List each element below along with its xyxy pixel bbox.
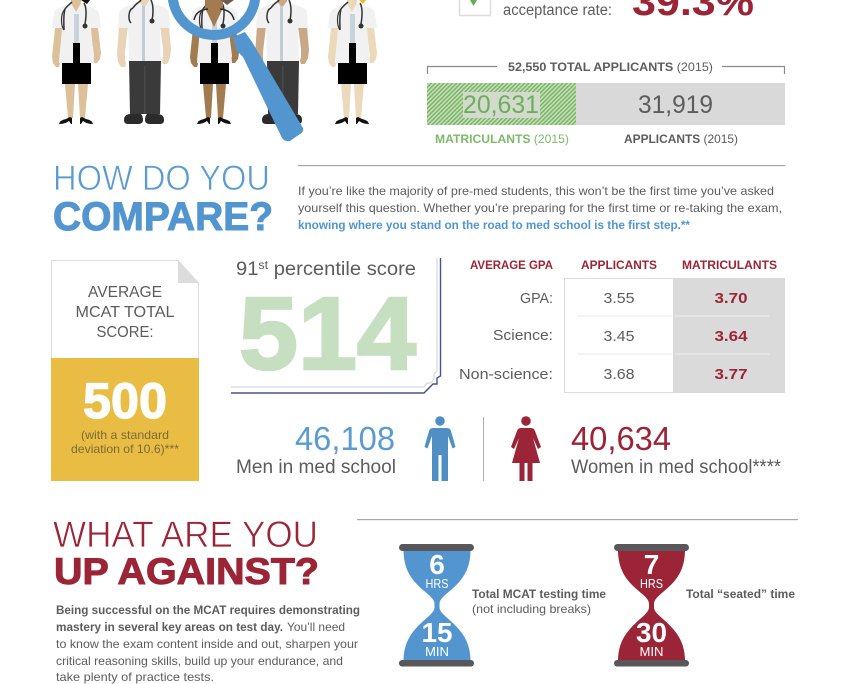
card heading: AVERAGE: [88, 284, 162, 301]
doctor 1: [52, 0, 101, 124]
seated time caption: Total “seated” time: [686, 587, 795, 601]
heading: what are you up against: UP AGAINST?: [54, 551, 319, 592]
icon: red hourglass, 7 hrs 30 min: MIN: [640, 644, 664, 659]
row labels: GPA:: [520, 290, 553, 307]
acceptance rate row: [460, 0, 754, 24]
icon: magnifying glass: [172, 0, 303, 141]
heading: what are you up against: [53, 514, 319, 592]
row dividers: [577, 316, 672, 354]
icon: blue hourglass, 6 hrs 15 min: MIN: [425, 644, 449, 659]
chart: total applicants bar: [427, 60, 785, 146]
matriculant values: [714, 290, 748, 383]
icon: blue hourglass, 6 hrs 15 min: [399, 544, 474, 666]
women in med school: [571, 420, 781, 478]
heading: how do you compare: [53, 159, 273, 239]
column headers: APPLICANTS: [581, 260, 657, 272]
applicants segment: [576, 83, 785, 125]
panel: average MCAT score card: [51, 260, 199, 481]
standard deviation note: [71, 428, 179, 456]
body paragraph: mastery in several key areas on test day.: [56, 620, 283, 634]
men in med school: [236, 420, 396, 478]
icon: red hourglass, 7 hrs 30 min: HRS: [640, 576, 663, 591]
percentile label: st: [258, 258, 269, 272]
intro paragraph: [298, 184, 782, 232]
testing time caption: [472, 587, 606, 616]
card heading: SCORE:: [96, 324, 154, 341]
body paragraph: critical reasoning skills, build up your endurance, and: [56, 654, 343, 668]
matriculant values: 3.64: [714, 328, 748, 345]
doctor 3: [190, 0, 239, 124]
men in med school: 46,108: [295, 420, 395, 457]
row labels: Non-science:: [459, 366, 553, 383]
row labels: [459, 290, 553, 383]
standard deviation note: deviation of 10.6)***: [71, 442, 179, 456]
row labels: Science:: [493, 327, 553, 344]
icon: man: [424, 416, 456, 481]
frame: [231, 258, 440, 393]
applicant values: 3.55: [604, 290, 634, 307]
applicant values: 3.45: [604, 328, 634, 345]
total applicants label: 52,550 TOTAL APPLICANTS (2015): [508, 60, 713, 74]
standard deviation note: (with a standard: [81, 428, 169, 442]
heading: how do you compare: HOW DO YOU: [53, 159, 270, 198]
women in med school: 40,634: [571, 420, 671, 457]
intro paragraph: yourself this question. Whether you’re preparing for the first time or re-taking the exam,: [298, 201, 782, 215]
doctor 4: [255, 0, 309, 124]
icon: check box: [460, 0, 490, 16]
doctor 2: [117, 0, 171, 124]
body paragraph: take plenty of practice tests.: [56, 670, 214, 684]
table: average GPA: [459, 260, 785, 393]
body paragraph: [56, 603, 360, 684]
heading: how do you compare: COMPARE?: [53, 195, 273, 239]
percentile label: percentile score: [268, 258, 416, 280]
bracket: [428, 66, 784, 74]
applicant values: [604, 290, 634, 383]
doctor 5: [328, 0, 377, 124]
testing time caption: (not including breaks): [472, 602, 591, 616]
body paragraph: Being successful on the MCAT requires demonstrating: [56, 603, 360, 617]
women in med school: Women in med school****: [571, 456, 781, 478]
column headers: AVERAGE GPA: [470, 260, 553, 272]
testing time caption: Total MCAT testing time: [472, 587, 606, 601]
card heading: [76, 284, 175, 341]
body paragraph: You’ll need: [287, 620, 345, 634]
icon: woman: [511, 416, 541, 481]
yellow block: [51, 358, 199, 481]
card heading: MCAT TOTAL: [76, 304, 175, 321]
icon: red hourglass, 7 hrs 30 min: [614, 544, 689, 666]
page fold: [178, 260, 198, 283]
percentile label: 91: [236, 258, 258, 280]
matriculants column shading: [673, 278, 785, 393]
illustration: doctors under magnifying glass: [52, 0, 377, 141]
applicant values: 3.68: [604, 366, 634, 383]
card outline: [52, 260, 198, 480]
applicants value: 31,919: [638, 91, 713, 119]
icon: red hourglass, 7 hrs 30 min: 30: [636, 617, 667, 648]
score value: 500: [83, 373, 167, 429]
icon: blue hourglass, 6 hrs 15 min: 6: [429, 549, 445, 580]
matriculants label: MATRICULANTS (2015): [435, 132, 569, 146]
applicants label: APPLICANTS (2015): [624, 132, 738, 146]
icon: blue hourglass, 6 hrs 15 min: HRS: [426, 576, 449, 591]
body paragraph: to know the exam content inside and out, sharpen your: [56, 637, 358, 651]
table body: [564, 278, 784, 392]
icon: red hourglass, 7 hrs 30 min: 7: [644, 549, 659, 580]
intro paragraph: knowing where you stand on the road to med school is the first step.**: [298, 218, 690, 232]
men in med school: Men in med school: [236, 456, 396, 478]
column headers: MATRICULANTS: [682, 260, 777, 272]
matriculant values: 3.77: [714, 366, 748, 383]
intro paragraph: If you’re like the majority of pre-med students, this won’t be the first time you’ve asked: [298, 184, 774, 198]
matriculants value: 20,631: [463, 91, 539, 119]
matriculant values: 3.70: [714, 290, 748, 307]
heading: what are you up against: WHAT ARE YOU: [53, 514, 318, 555]
acceptance rate label: acceptance rate:: [503, 2, 612, 19]
icon: blue hourglass, 6 hrs 15 min: 15: [422, 617, 452, 648]
panel: 91st percentile score: [231, 258, 440, 393]
percentile value: 514: [239, 276, 416, 391]
column headers: [470, 260, 777, 272]
matriculants segment: [427, 83, 576, 125]
